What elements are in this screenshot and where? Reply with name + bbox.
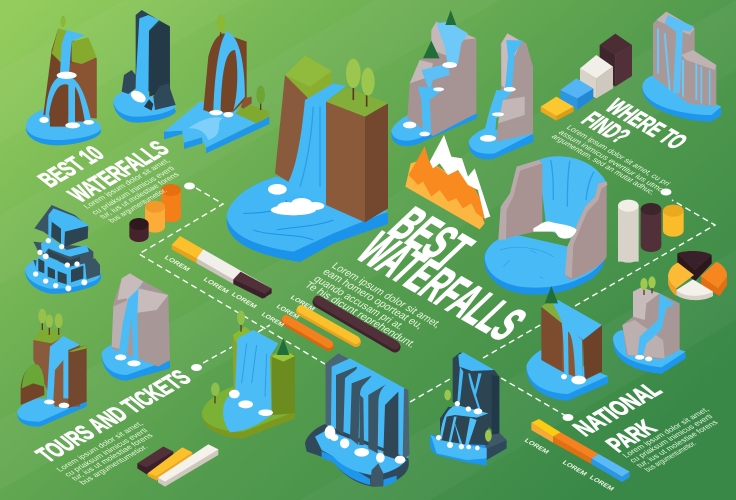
text block: where to find body: Lorem ipsum dolor sit amet, cu pri [564, 124, 673, 187]
lorem labels: LOREM [163, 255, 191, 273]
chart: three cylinders right [618, 200, 684, 263]
heading: best waterfalls: WATERFALLS [345, 222, 539, 350]
waterfall 2: dark slate column [113, 10, 176, 123]
heading: best waterfalls: BEST [377, 197, 485, 276]
heading: best 10 waterfalls [31, 136, 175, 207]
text block: tours body: cu priaksum inimicus everti [63, 427, 150, 478]
text block: main body: Te his dicunt reprehendunt. [302, 280, 418, 350]
text block: where to find body: argumentum, sed an mutat adhuc. [549, 133, 657, 196]
text block: tours body: tur, ius ut molestiae forens [70, 432, 155, 482]
waterfall 9: brown cliff with pine [526, 286, 608, 401]
waterfall 14: grey rock falls [102, 273, 170, 381]
lorem labels: LOREM [275, 304, 300, 320]
text block: best 10 body: cu priaksum inimicus everti [90, 165, 177, 216]
bar chart: national park segmented bar [531, 419, 630, 482]
text block: best 10 body: tur, ius ut molestiae forens [98, 171, 181, 220]
heading: where to find [575, 94, 694, 154]
waterfall 6: tall grey rock [469, 33, 534, 159]
heading: where to find: FIND? [575, 107, 637, 148]
heading: national park: PARK [599, 415, 663, 457]
lorem labels [163, 255, 615, 492]
heading: national park [566, 377, 668, 457]
connector dots [184, 182, 672, 421]
text block: main body [302, 261, 444, 350]
waterfall 16: dark tiered block falls [25, 205, 101, 294]
heading: tours and tickets: TOURS AND TICKETS [29, 365, 197, 467]
lorem labels: LOREM [260, 312, 285, 328]
waterfall 1: green cliff two-tier [26, 16, 101, 145]
lorem labels: LOREM [588, 475, 615, 492]
lorem labels: LOREM [202, 277, 230, 295]
waterfall 10: small grey rock with trees [613, 276, 686, 374]
lorem labels: LOREM [523, 438, 550, 455]
chart: isometric cube steps [541, 34, 632, 121]
waterfall 12: large slate falls [305, 353, 409, 487]
heading: best 10 waterfalls: WATERFALLS [61, 136, 175, 207]
waterfall 7: far right grey double fall [642, 12, 721, 122]
waterfall 15: brown and green cliff [17, 309, 87, 427]
waterfall 3: brown rock and delta [164, 14, 269, 153]
heading: best 10 waterfalls: BEST 10 [31, 141, 110, 192]
chart: isometric pie [668, 251, 727, 300]
waterfall 4: main centre waterfall [227, 56, 388, 262]
text block: main body: Lorem ipsum dolor sit amet, [329, 261, 444, 330]
text block: national park body: cu priaksum inimicus everti [628, 413, 715, 464]
text block: main body: quando accusam pri at. [311, 274, 407, 332]
dashed connector lines [139, 188, 715, 416]
text block: tours body: bus argumentumetior. [78, 443, 150, 486]
lorem labels: LOREM [289, 295, 316, 312]
lorem labels: LOREM [561, 460, 588, 477]
text block: main body: eam homero oporteat eu, [320, 267, 426, 331]
text block: where to find body: assum inimicus evertitur ius utmol [556, 129, 668, 194]
chart: three cylinders left [129, 184, 181, 242]
text block: best 10 body: Lorem ipsum dolor sit amet, [82, 157, 172, 210]
heading: national park: NATIONAL [566, 377, 668, 441]
text block: national park body: Lorem ipsum dolor sit amet, [621, 406, 711, 459]
heading: best waterfalls [345, 197, 539, 350]
chart: stacked colour bars [137, 444, 218, 487]
waterfall 8: grey horseshoe gorge [484, 156, 607, 295]
waterfall 13: green mossy waterfall [202, 310, 295, 438]
text block: tours body: Lorem ipsum dolor sit amet, [55, 420, 145, 473]
waterfall 5: stepped grey rock [391, 10, 477, 146]
bar chart: rounded bars [286, 300, 395, 347]
text block: best 10 body: bus argumentumetior. [107, 187, 169, 224]
lorem labels: LOREM [230, 292, 258, 310]
text block: national park body: tur, ius ut molestiae forens [635, 419, 720, 469]
bar chart: yellow white brown isometric bar [172, 236, 272, 299]
icon: orange and white mountains [405, 135, 490, 229]
waterfall 11: dark cliff tiered [430, 352, 507, 466]
text block: national park body: bus argumentumetior. [643, 440, 698, 473]
